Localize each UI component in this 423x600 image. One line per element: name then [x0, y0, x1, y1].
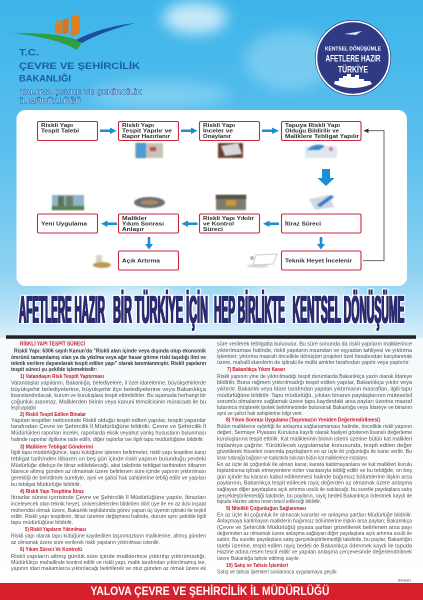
section 10: Satış ve Tahsis İşlemleri: 10) Satış ve Tahsis İşlemleri — [226, 562, 289, 569]
section 6: Yıkım Süreci Ve Kontrolü: 6) Yıkım Süreci Ve Kontrolü — [20, 547, 82, 553]
section 1: Vatandaşın Risk Tespiti Yaptırması: 1) Vatandaşın Risk Tespiti Yaptırması — [20, 374, 105, 380]
step: Riskli Yapı Tespit Talebi: Tespit Talebi — [41, 129, 80, 135]
section 8: Yıkım Sonrası Uygulama: En az üçte iki çoğunluk ile alınan karar, karara katılmayanlara ve kat malikleri kurulu — [217, 462, 412, 468]
section 9: Nitelikli Çoğunluğun Sağlanması: 9) Nitelikli Çoğunluğun Sağlanması — [226, 506, 307, 512]
section 8: Yıkım Sonrası Uygulama: karar tutanağa bağlanır ve toplantıda bulunan bütün kat maliklerince imzalanır. — [217, 456, 368, 462]
section 8: Yıkım Sonrası Uygulama: paylarının, Bakanlıkça tespit edilecek rayiç değerden az olmamak üzere anlaşma — [217, 480, 412, 486]
section 6: Yıkım Süreci Ve Kontrolü — [11, 547, 206, 572]
badge: Kentsel Dönüşümle Afetlere Hazır Türkiye — [315, 20, 391, 96]
icon: worker with coins — [93, 255, 111, 268]
section 2: Riskli Tespit Edilen Binalar: 2) Riskli Tespit Edilen Binalar — [20, 412, 86, 418]
section 9: Nitelikli Çoğunluğun Sağlanması: üzere Bakanlığa tahsis edilmiş sayılır. — [217, 556, 300, 562]
icon: laptop and figure — [247, 254, 277, 268]
step: İnceler ve Onaylanır: Riskli Yapı — [203, 123, 236, 129]
section 7: Bakanlıkça Yıkım Kararı: Riskli yapının yine de yıktırılmadığı tespit durumlarda Bakanlıkça yazılı olarak İdareye — [217, 373, 412, 380]
section 2: Riskli Tespit Edilen Binalar: halinde raporlar ilgilisine iade edilir, diğer raporlar ise ilgili tapu müdürlüğüne bildirilir. — [11, 437, 204, 443]
section 7: Bakanlıkça Yıkım Kararı: sorumlu olmalarını sağlamak üzere tapu kaydındaki arsa payları üzerine masraf — [217, 399, 413, 405]
heading: ministry name — [19, 48, 140, 85]
step: Tapuya Riskli Yapı bildirimi — [282, 122, 361, 140]
section 9: Nitelikli Çoğunluğun Sağlanması — [217, 506, 412, 562]
section 8: Yıkım Sonrası Uygulama: Bütün maliklerce oybirliği ile anlaşma sağlanamaması halinde, öncelikle riskli yapının — [217, 424, 412, 430]
section 4: Riskli Yapı Tespitine İtiraz: İtirazlar süresi içerisinde Çevre ve Şehircilik İl Müdürlüğüne yapılır. İtirazları — [11, 494, 206, 501]
badge: Kentsel Dönüşümle Afetlere Hazır Türkiye: TÜRKİYE — [338, 64, 368, 76]
section 1: Vatandaşın Risk Tespiti Yaptırması: lisanslandırılacak, kurum ve kuruluşlara tespit ettirebilirler. Bu aşamada herhangi bir — [11, 393, 206, 399]
section 8: Yıkım Sonrası Uygulama: sağlayan diğer paydaşlara açık artırma usulü ile satılacağı, bu suretle paydaşlara satış — [217, 487, 412, 493]
section 3: Maliklere Tebligat Gönderimi: bu tebligat Müdürlüğe bildirilir. — [11, 482, 81, 488]
section 6 continued: işlemleri; yıktırma masrafı öncelikle dönüşüm projeleri özel hesabından karşılanmak — [217, 354, 412, 360]
step: Riskli Yapı Yıkılır ve Kontrol Süreci: ve Kontrol — [203, 222, 235, 228]
section 8: Yıkım Sonrası Uygulama: toplantısına iştirak etmeyenlere noter vasıtasıyla tebliğ edilir ve bu tebliğde, on beş — [217, 468, 412, 474]
icon: notification mail — [305, 145, 337, 158]
section 8: Yıkım Sonrası Uygulama: değeri, Sermaye Piyasası Kuruluna kayıtlı olarak faaliyet gösteren lisanslı değerleme — [217, 430, 412, 436]
section 5: Riskli Yapıların Yıktırılması: 5) Riskli Yapıların Yıktırılması — [25, 527, 86, 533]
text block: right column — [217, 342, 413, 576]
badge: Kentsel Dönüşümle Afetlere Hazır Türkiye: KENTSEL DÖNÜŞÜMLE — [325, 46, 381, 52]
section 3: Maliklere Tebligat Gönderimi: tebligat tarihinden itibaren on beş gün içinde riskli yapının bulunduğu yerdeki — [11, 456, 206, 462]
footer banner: YALOVA ÇEVRE VE ŞEHİRCİLİK İL MÜDÜRLÜĞÜ — [90, 585, 330, 598]
arrow: step 1 to 2 — [100, 128, 116, 134]
section 10: Satış ve Tahsis İşlemleri: Satış ve tahsis işlemleri sonlanınca uygulamaya geçilir. — [217, 570, 338, 576]
section 2: Riskli Tespit Edilen Binalar — [11, 412, 206, 443]
step: İnceler ve Onaylanır — [200, 122, 260, 140]
section 6 continued — [217, 342, 412, 366]
section 5: Riskli Yapıların Yıktırılması — [11, 527, 206, 546]
section 4: Riskli Yapı Tespitine İtiraz: mühendisi olmak üzere, Bakanlık teşkilatında görev yapan üç üyenin iştiraki ile teşkil — [11, 508, 206, 514]
section 8: Yıkım Sonrası Uygulama: gözetilerek hisseleri oranında paydaşların en az üçte iki çoğunluğu ile karar verilir. Bu — [217, 449, 412, 455]
step: İtiraz Süreci: İtiraz Süreci — [285, 220, 322, 228]
arrow: malikler to yeni uygulama — [101, 220, 117, 227]
section: Riskli Yapı Tespit Süreci — [11, 340, 206, 373]
section 2: Riskli Tespit Edilen Binalar: tarafından Çevre ve Şehircilik İl Müdürlüğüne bildirilir. Çevre ve Şehircilik İl — [11, 423, 206, 430]
section 9: Nitelikli Çoğunluğun Sağlanması: Anlaşmaya katılmayan maliklerin bağımsız bölümlerine ilişkin arsa payları; Bakanlıkça — [217, 518, 412, 524]
section 2: Riskli Tespit Edilen Binalar: Müdürlükleri raporları inceler, raporlarda eksik veyahut yanlış hususların bulunması — [11, 430, 206, 436]
icon: meeting table — [134, 197, 165, 208]
step: Malikler Yıkım Sonrası Anlaşır: Anlaşır — [122, 227, 145, 233]
heading: provincial directorate — [20, 88, 142, 106]
step: Teknik Heyet İncelenir — [282, 251, 361, 270]
arrow: step 2 to 3 — [181, 128, 198, 134]
sky background — [0, 0, 423, 341]
arrow: itiraz to yıkım — [263, 220, 279, 227]
arrow: big down — [318, 169, 334, 186]
section: Riskli Yapı Tespit Süreci: ömrünü tamamlamış olan ya da yıkılma veya ağır hasar görme riski taşıdığı ilmi ve — [11, 355, 206, 361]
section 3: Maliklere Tebligat Gönderimi: 3) Maliklere Tebligat Gönderimi — [20, 444, 94, 450]
step: İnceler ve Onaylanır: İnceler ve — [203, 128, 233, 135]
step: Tapuya Riskli Yapı bildirimi: Olduğu Bildirilir ve — [285, 129, 339, 135]
arrow: yıkım to malikler — [182, 220, 198, 227]
section 9: Nitelikli Çoğunluğun Sağlanması: (Çevre ve Şehircilik Müdürlüğü) piyasa şartları gözetilerek belirlenen arsa payı — [217, 525, 412, 531]
section 8: Yıkım Sonrası Uygulama: tapuda Hazine adına resen tescil edileceği bildirilir. — [217, 499, 321, 505]
step: Tespit Yapılır ve Rapor Hazırlanır: Riskli Yapı — [122, 123, 155, 129]
heading: ministry name: ÇEVRE VE ŞEHİRCİLİK — [19, 61, 140, 72]
section: Riskli Yapı Tespit Süreci: Riskli Yapı: 6306 sayılı Kanun'da "Riskli alan içinde veya dışında olup ekonomik — [14, 348, 206, 354]
section 8: Yıkım Sonrası Uygulama: gerçekleştirilemediği takdirde, bu payların, rayiç bedeli Bakanlıkça ödenmek kaydı ile — [217, 494, 412, 500]
section 8: Yıkım Sonrası Uygulama: toplantıya çağrılır. Yürütülecek uygulamalar konusunda, tespit edilen değer — [217, 443, 412, 449]
arrow: step 3 to 4 — [262, 128, 279, 134]
section 7: Bakanlıkça Yıkım Kararı: yıktırılır. Bakanlık veya İdare tarafından yapılan yıktırmanın masrafları, ilgili tapu — [217, 386, 412, 392]
section 9: Nitelikli Çoğunluğun Sağlanması: satılır. Bu suretle paydaşlara satış gerçekleştirilemediği takdirde, bu paylar, Bakanlığın — [217, 537, 412, 543]
panel: urban transformation flowchart — [16, 110, 407, 286]
icon: pen and paper — [309, 195, 334, 210]
section 6 continued: üzere, mahalli idarelerin de iştiraki ile mülki amirler tarafından yapılır veya yaptırılır. — [217, 360, 410, 366]
heading: ministry name: T.C. — [19, 48, 39, 58]
heading: provincial directorate: YALOVA ÇEVRE VE ŞEHİRCİLİK — [20, 88, 142, 96]
section 4: Riskli Yapı Tespitine İtiraz: edilir. Riskli yapı tespitinin, itiraz üzerine değişmesi halinde, durum aynı şekilde ilgili — [11, 514, 206, 520]
arrow: itiraz to teknik heyet — [317, 237, 325, 250]
section 4: Riskli Yapı Tespitine İtiraz: 4) Riskli Yapı Tespitine İtiraz — [20, 488, 84, 495]
section 9: Nitelikli Çoğunluğun Sağlanması: talebi üzerine, tespit edilen rayiç bedeli de Bakanlıkça ödenmek kaydı ile tapuda — [217, 544, 412, 550]
section 1: Vatandaşın Risk Tespiti Yaptırması: büyükşehir belediyelerine, büyükşehir ilçe belediyelerine veya Bakanlıkça — [11, 387, 206, 393]
section: Riskli Yapı Tespit Süreci: tespit süreci şu şekilde işlemektedir: — [11, 367, 97, 373]
section 6: Yıkım Süreci Ve Kontrolü: Müdürlükçe mahallinde kontrol edilir ve riskli yapı, malik tarafından yıktırılmamış ise, — [11, 560, 206, 566]
section 7: Bakanlıkça Yıkım Kararı: 7) Bakanlıkça Yıkım Kararı — [227, 367, 285, 373]
section 3: Maliklere Tebligat Gönderimi: İdarece altmış günden az olmamak üzere belirlenen süre içinde yapının yıktırılması — [11, 468, 206, 475]
text block: left column — [11, 340, 207, 572]
heading: provincial directorate: İL MÜDÜRLÜĞÜ — [20, 96, 81, 106]
footer banner — [0, 583, 423, 600]
step: Tapuya Riskli Yapı bildirimi: Maliklere Tebligat Yapılır — [285, 134, 360, 140]
section 8: Yıkım Sonrası Uygulama: kuruluşlarına tespit ettirilir. Kat maliklerinin birinin istemi üzerine bütün kat malikleri — [217, 436, 412, 442]
step: İtiraz Süreci — [282, 214, 361, 233]
section 4: Riskli Yapı Tespitine İtiraz: tapu müdürlüğüne bildirilir. — [11, 520, 73, 526]
section 3: Maliklere Tebligat Gönderimi: Müdürlüğe dilekçe ile itiraz edilebileceği, aksi takdirde tebligat tarihinden itibaren — [11, 463, 206, 469]
section 5: Riskli Yapıların Yıktırılması: Riskli yapı olarak tapu kütüğüne kaydedilen taşınmazların maliklerine, altmış günden — [11, 534, 206, 540]
section 7: Bakanlıkça Yıkım Kararı: tutarınca müşterek ipotek belirtmesinde bulunarak Bakanlığa veya İdareye ve binanın — [217, 404, 412, 411]
lower text background — [0, 338, 423, 584]
step: Riskli Yapı Tespit Talebi — [38, 122, 98, 140]
step: İnceler ve Onaylanır: Onaylanır — [203, 134, 232, 140]
arrow: malikler to açık artırma — [145, 237, 153, 250]
step: Tapuya Riskli Yapı bildirimi: Tapuya Riskli Yapı — [285, 123, 341, 129]
section 3: Maliklere Tebligat Gönderimi: gerektiği de belirtilmek suretiyle, ayni ve şahsî hak sahiplerine tebliğ edilir ve yapıları — [11, 476, 206, 482]
icon: engineer photo — [135, 143, 163, 158]
step: Açık Artırma — [118, 251, 178, 270]
section 7: Bakanlıkça Yıkım Kararı: ayni ve şahsî hak sahiplerine bilgi verir. — [217, 411, 303, 417]
step: Malikler Yıkım Sonrası Anlaşır — [118, 214, 178, 233]
logo: ministry emblem — [13, 14, 135, 50]
section 9: Nitelikli Çoğunluğun Sağlanması: Hazine adına resen tescil edilir ve yapılan anlaşma çerçevesinde değerlendirilmek — [217, 550, 412, 556]
section 7: Bakanlıkça Yıkım Kararı: bildirilir. Buna rağmen yıktırılmadığı tespit edilen yapılar, Bakanlıkça yıkılır veya — [217, 380, 412, 386]
printer mark: 6man — [398, 578, 412, 582]
section 7: Bakanlıkça Yıkım Kararı — [217, 367, 413, 417]
section 6 continued: yıktırılmaması halinde, riskli yapıların insandan ve eşyadan tahliyesi ve yıktırma — [217, 348, 412, 354]
section 8: Yıkım Sonrası Uygulama — [217, 418, 412, 505]
section 1: Vatandaşın Risk Tespiti Yaptırması: Vatandaşlar yapılarını, Bakanlığa, belediyelere, il özel idarelerine, büyükşehirlerde — [11, 380, 206, 386]
section 6: Yıkım Süreci Ve Kontrolü: yapının idari makamlarca yıktırılacağı belirtilerek ve otuz günden az olmak üzere ek — [11, 566, 206, 572]
section 7: Bakanlıkça Yıkım Kararı: müdürlüğüne bildirilir. Tapu müdürlüğü, yıkılan binanın paydaşlarının müteselsil — [217, 393, 412, 399]
section 3: Maliklere Tebligat Gönderimi: İlgili tapu müdürlüğünce, tapu kütüğüne işlenen belirtmeler, riskli yapı tespitine karşı — [11, 449, 206, 456]
title banner: AFETLERE HAZIR — [19, 290, 105, 332]
section 10: Satış ve Tahsis İşlemleri — [217, 562, 338, 576]
icon: excavator photo — [216, 195, 246, 210]
step: Malikler Yıkım Sonrası Anlaşır: Malikler — [122, 216, 148, 222]
section 1: Vatandaşın Risk Tespiti Yaptırması: çoğunluk aranmaz. Maliklerden birinin veya kanuni temsilcisinin müracaatı ile bu — [11, 399, 206, 405]
section: Riskli Yapı Tespit Süreci: teknik verilere dayanılarak tespit edilen yapı" olarak tanımlanmıştır. Riskli yapıların — [11, 361, 206, 367]
step: Tespit Yapılır ve Rapor Hazırlanır: Tespit Yapılır ve — [122, 129, 172, 135]
step: Riskli Yapı Yıkılır ve Kontrol Süreci — [200, 214, 260, 233]
section 4: Riskli Yapı Tespitine İtiraz: inceleyecek olan teknik heyet, üniversitelerden bildirilen dört üye ile en az ikisi inşaat — [11, 502, 207, 508]
section 3: Maliklere Tebligat Gönderimi — [11, 444, 206, 488]
heading: ministry name: BAKANLIĞI — [19, 73, 71, 85]
section 6 continued: süre verilerek tebligatta bulunulur. Bu süre sonunda da riskli yapıların maliklerince — [217, 342, 412, 348]
section 8: Yıkım Sonrası Uygulama: 8) Yıkım Sonrası Uygulama (Taşınmazın Yeniden Değerlendirilmesi) — [226, 418, 380, 424]
step: Tespit Yapılır ve Rapor Hazırlanır: Rapor Hazırlanır — [122, 134, 171, 140]
step: Riskli Yapı Tespit Talebi: Riskli Yapı — [41, 123, 74, 129]
step: Tespit Yapılır ve Rapor Hazırlanır — [118, 122, 178, 140]
badge: Kentsel Dönüşümle Afetlere Hazır Türkiye: AFETLERE HAZIR — [326, 54, 381, 64]
step: Yeni Uygulama: Yeni Uygulama — [41, 222, 88, 228]
icon: report document photo — [218, 143, 243, 158]
step: Malikler Yıkım Sonrası Anlaşır: Yıkım Sonrası — [122, 222, 165, 228]
section 9: Nitelikli Çoğunluğun Sağlanması: değerinden az olmamak üzere anlaşma sağlayan diğer paydaşlara açık artırma usulü ile — [217, 531, 412, 537]
section 1: Vatandaşın Risk Tespiti Yaptırması: tespit yapılabilir — [11, 405, 36, 411]
icon: new buildings photo — [52, 195, 84, 210]
arrow: teknik heyet back to tapu — [363, 128, 384, 261]
section 9: Nitelikli Çoğunluğun Sağlanması: En az üçte iki çoğunluk ile alınacak kararlar ve anlaşma şartları Müdürlüğe bildirilir. — [217, 512, 412, 518]
step: Açık Artırma: Açık Artırma — [122, 258, 161, 264]
section 6: Yıkım Süreci Ve Kontrolü: Riskli yapıların altmış günlük süre içinde maliklerince yıktırılıp yıktırılmadığı, — [11, 554, 206, 560]
section 5: Riskli Yapıların Yıktırılması: az olmamak üzere süre verilerek riskli yapıların yıktırılması istenilir. — [11, 540, 160, 546]
step: Riskli Yapı Yıkılır ve Kontrol Süreci: Süreci — [203, 227, 224, 233]
section 1: Vatandaşın Risk Tespiti Yaptırması — [11, 374, 206, 411]
step: Riskli Yapı Yıkılır ve Kontrol Süreci: Riskli Yapı Yıkılır — [203, 216, 255, 222]
section: Riskli Yapı Tespit Süreci: RİSKLİ YAPI TESPİT SÜRECİ — [20, 340, 86, 348]
section 4: Riskli Yapı Tespitine İtiraz — [11, 488, 207, 526]
step: Yeni Uygulama — [38, 214, 98, 233]
section 2: Riskli Tespit Edilen Binalar: Yapılan tespitler neticesinde Riskli olduğu tespit edilen yapılar, tespiti yapanlar — [11, 418, 206, 424]
step: Teknik Heyet İncelenir: Teknik Heyet İncelenir — [285, 258, 353, 264]
section 8: Yıkım Sonrası Uygulama: gün içinde bu kararın kabul edilmemesi halinde bağımsız bölümlerine ilişkin arsa — [217, 474, 412, 480]
